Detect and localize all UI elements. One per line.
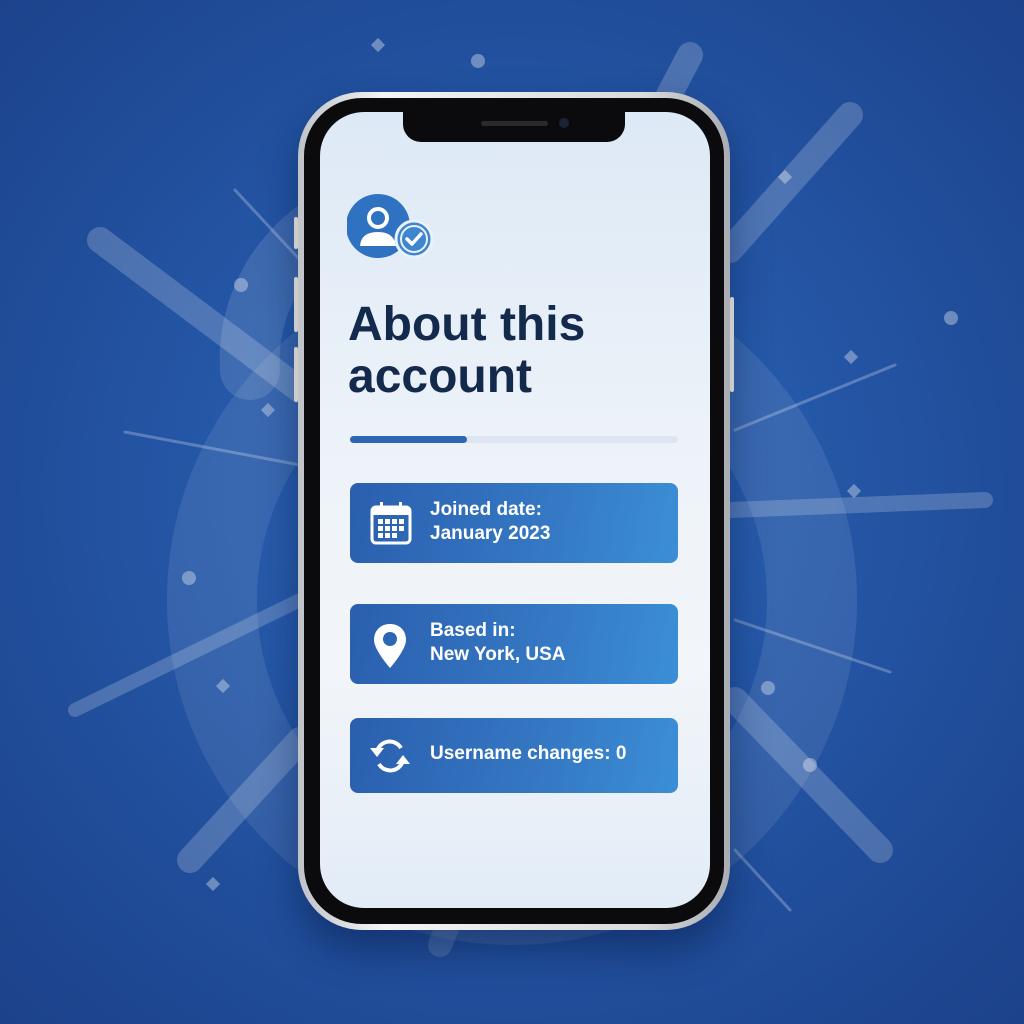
notch — [403, 112, 625, 142]
text: location — [430, 620, 566, 665]
title: About this — [348, 298, 585, 351]
text: joined date: Joined date: — [430, 499, 542, 520]
card: location — [350, 604, 678, 684]
title: account — [348, 350, 532, 403]
text: location: New York, USA — [430, 644, 566, 665]
text: location: Based in: — [430, 620, 516, 641]
text: username changes: Username changes: 0 — [430, 743, 626, 764]
progress bar — [350, 436, 678, 443]
card: username changes — [350, 718, 678, 793]
icon: refresh — [370, 740, 410, 772]
phone — [298, 92, 730, 930]
icon: map pin — [374, 624, 406, 668]
side buttons — [294, 217, 298, 249]
screen — [320, 112, 710, 908]
text: joined date: January 2023 — [430, 523, 550, 544]
text: joined date — [430, 499, 550, 544]
title — [348, 298, 585, 403]
icon: calendar — [370, 502, 412, 544]
card: joined date — [350, 483, 678, 563]
icon: verified user — [347, 194, 430, 258]
